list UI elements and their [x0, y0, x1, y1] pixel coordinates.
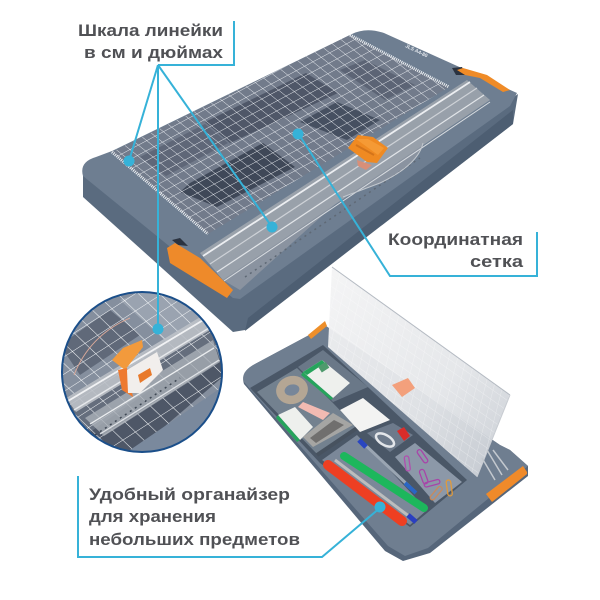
- callout dots: ruler scale: [124, 156, 278, 334]
- lid: [328, 266, 510, 478]
- panel: magnifier: [61, 291, 223, 453]
- orange hinge bottom: [486, 466, 527, 502]
- compartment floors: [257, 350, 462, 525]
- second staple box: [276, 407, 313, 442]
- staple remover: [303, 413, 353, 447]
- red marker: [328, 465, 402, 521]
- tray top face: [243, 326, 528, 556]
- heading: ruler scale line two: в см и дюймах: [84, 43, 224, 62]
- ruler on base: [223, 143, 423, 290]
- heading: coordinate grid: Координатная: [388, 230, 523, 249]
- orange end clamp left: [167, 238, 233, 298]
- tray inner well: [250, 345, 467, 527]
- orange slider: [348, 135, 388, 170]
- grid board: [111, 34, 449, 235]
- text: organizer line two: для хранения: [89, 507, 216, 526]
- blue pen: [359, 440, 416, 493]
- pink sticker: [298, 402, 330, 420]
- trimmer body side: [83, 94, 518, 332]
- magnified cutter: [112, 340, 163, 397]
- text: organizer line three: небольших предметов: [89, 530, 300, 549]
- heading: ruler scale: Шкала линейки: [78, 21, 223, 40]
- trimmer top face: [82, 30, 517, 299]
- text: organizer line one: Удобный органайзер: [89, 485, 290, 504]
- callout: organizer: [78, 476, 386, 557]
- tray outer body: [243, 326, 528, 561]
- orange end clamp right: [452, 67, 510, 92]
- silver pen: [335, 460, 416, 522]
- rail rods: [482, 450, 508, 480]
- panel: organizer tray: [243, 260, 528, 561]
- white paper: [340, 398, 390, 432]
- green marker: [344, 456, 424, 508]
- logo on trimmer: JLS A4-80: [404, 43, 429, 59]
- clear rail: [200, 80, 490, 281]
- staple box: [301, 360, 350, 400]
- heading: coordinate grid line two: сетка: [470, 252, 524, 271]
- callout: coordinate grid: [292, 128, 537, 276]
- panel: paper trimmer: [82, 20, 518, 332]
- paper clips: [404, 449, 453, 501]
- infographic canvas: [61, 21, 538, 561]
- tape roll: [273, 372, 311, 408]
- orange hinge top: [308, 321, 327, 339]
- callout lines: ruler scale: [129, 21, 272, 329]
- binder clips and red clip: [374, 427, 410, 449]
